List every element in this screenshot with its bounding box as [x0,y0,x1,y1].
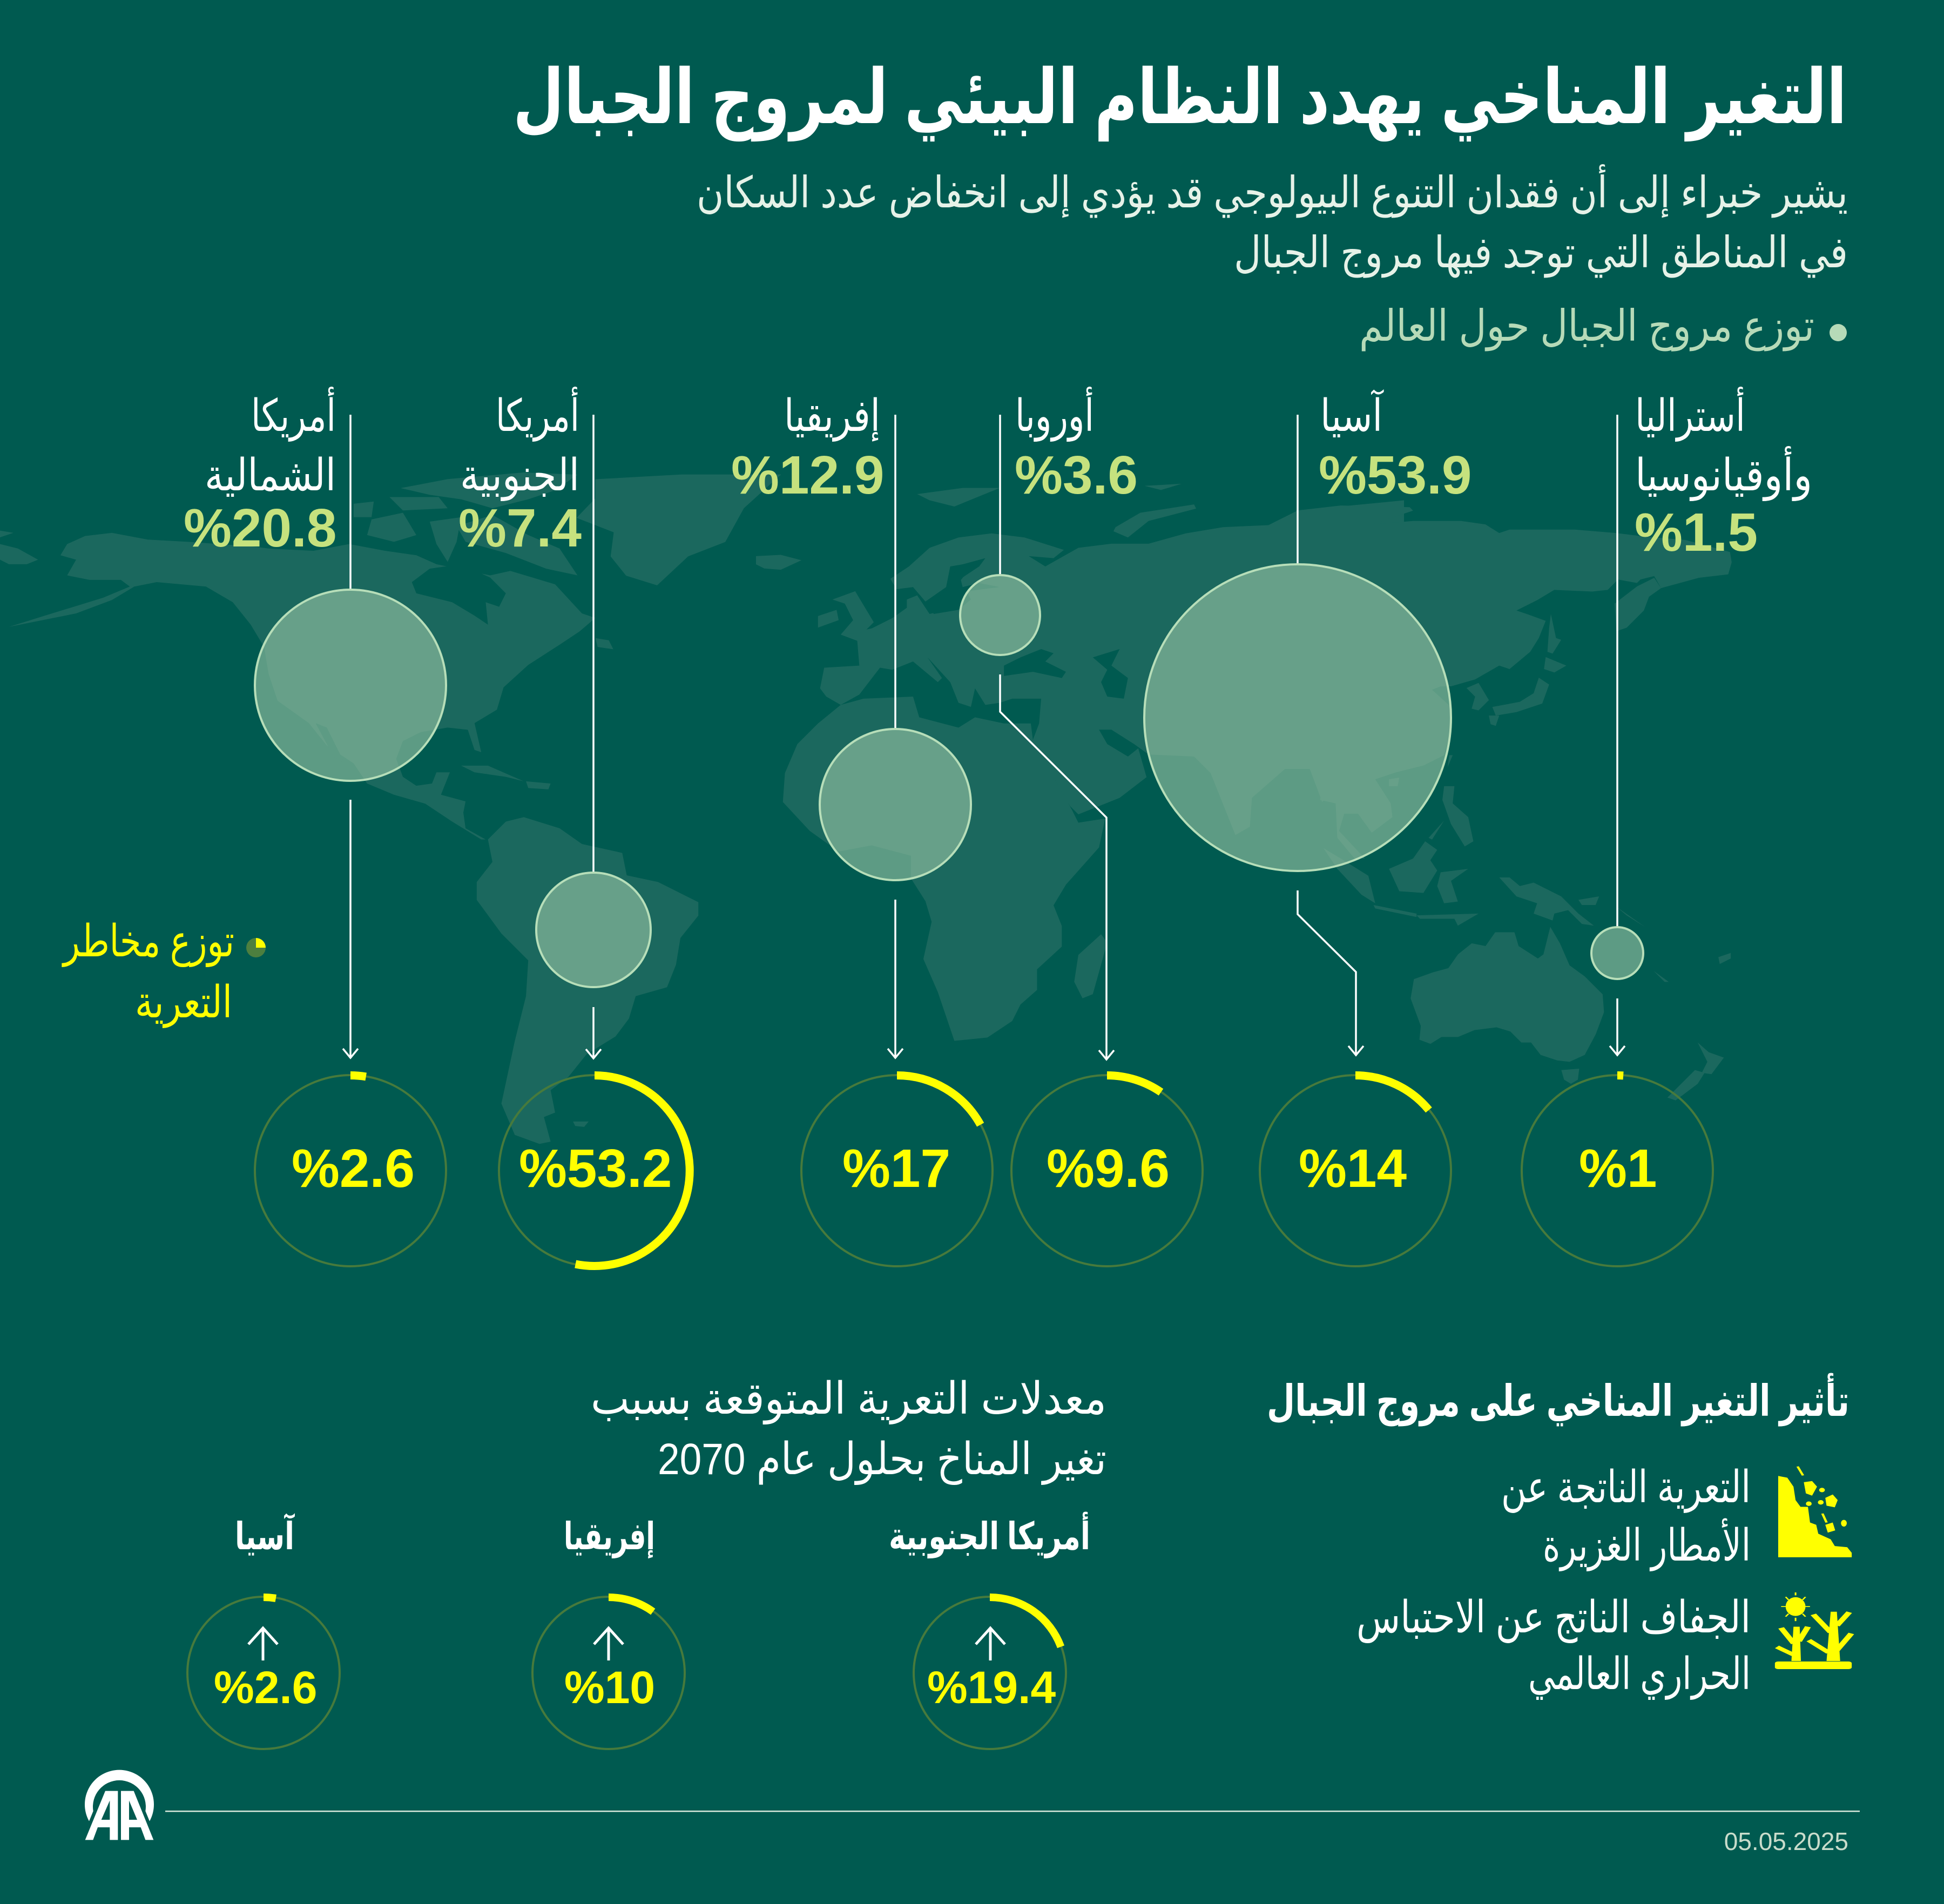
date: 05.05.2025 [1724,1827,1848,1855]
label: Australia and Oceania: أستراليا [1635,387,1745,442]
impact text: drought from global warming [1356,1593,1751,1700]
label: North America: أمريكا [251,387,336,442]
projection: South America: أمريكا الجنوبية [889,1511,1090,1558]
impact text: erosion from heavy rain [1501,1463,1751,1571]
legend: erosion risk distribution: التعرية [135,978,232,1028]
erosion ring: Africa [801,1075,993,1266]
icon: falling rocks [1778,1467,1852,1557]
subtitle [697,164,1848,278]
label: South America: %7.4 [458,498,582,558]
projection: Africa [532,1515,685,1749]
impact text: drought from global warming: الحراري العالمي [1528,1650,1751,1700]
projection: Asia: آسيا [235,1513,295,1557]
label: North America: الشمالية [205,451,336,500]
label: Australia and Oceania: وأوقيانوسيا [1635,446,1812,501]
projection: Africa: إفريقيا [564,1515,655,1559]
label: Australia and Oceania [1635,387,1812,563]
label: North America: %20.8 [184,498,337,558]
projection: South America: %19.4 [927,1662,1056,1713]
impact text: drought from global warming: الجفاف الناتج عن الاحتباس [1356,1593,1751,1643]
label: North America [184,387,337,558]
heading: projected erosion rates: معدلات التعرية المتوقعة بسبب [591,1374,1106,1424]
icon: sun and dry trees [1775,1592,1852,1669]
erosion ring: North America: %2.6 [292,1138,415,1199]
footer rule [165,1811,1860,1812]
label: Asia: آسيا [1320,389,1384,441]
impact text: erosion from heavy rain: التعرية الناتجة عن [1501,1463,1751,1513]
erosion ring: North America [255,1075,446,1266]
label: South America: أمريكا [496,387,579,442]
erosion ring: Europe [1011,1075,1203,1266]
label: Australia and Oceania: %1.5 [1635,502,1758,563]
world map [0,472,1732,1144]
erosion ring: Asia: %14 [1299,1138,1407,1199]
erosion ring: Europe: %9.6 [1047,1138,1170,1199]
label: Europe: أوروبا [1015,387,1094,442]
erosion ring: Australia and Oceania [1522,1075,1713,1266]
label: Africa [731,391,885,505]
heading: projected erosion rates [591,1374,1106,1485]
erosion ring: Asia [1260,1075,1451,1266]
label: Africa: إفريقيا [784,391,880,442]
impact text: erosion from heavy rain: الأمطار الغزيرة [1543,1518,1751,1571]
connector lines [343,415,1625,1059]
heading: projected erosion rates: تغير المناخ بحلول عام 2070 [658,1435,1106,1485]
label: Asia [1319,389,1472,505]
legend: mountain meadows distribution: توزع مروج الجبال حول العالم [1359,302,1814,352]
erosion ring: Australia and Oceania: %1 [1579,1138,1657,1199]
subtitle: في المناطق التي توجد فيها مروج الجبال [1234,228,1848,278]
logo: Anadolu Agency [85,1770,154,1840]
projection: Asia: %2.6 [214,1662,317,1713]
projection: South America [889,1511,1090,1749]
label: Europe: %3.6 [1015,445,1138,505]
bubbles: meadow share by region [255,564,1643,987]
erosion ring: South America [499,1075,690,1266]
legend: erosion risk distribution: توزع مخاطر [62,917,234,967]
label: Africa: %12.9 [731,445,885,505]
projection: Asia [187,1513,340,1749]
label: Europe [1015,387,1138,505]
label: South America [458,387,582,558]
erosion ring: Africa: %17 [842,1138,950,1199]
erosion ring: South America: %53.2 [519,1138,672,1199]
legend: erosion risk distribution [62,917,266,1028]
projection: Africa: %10 [564,1662,655,1713]
label: Asia: %53.9 [1319,445,1472,505]
label: South America: الجنوبية [460,451,579,501]
